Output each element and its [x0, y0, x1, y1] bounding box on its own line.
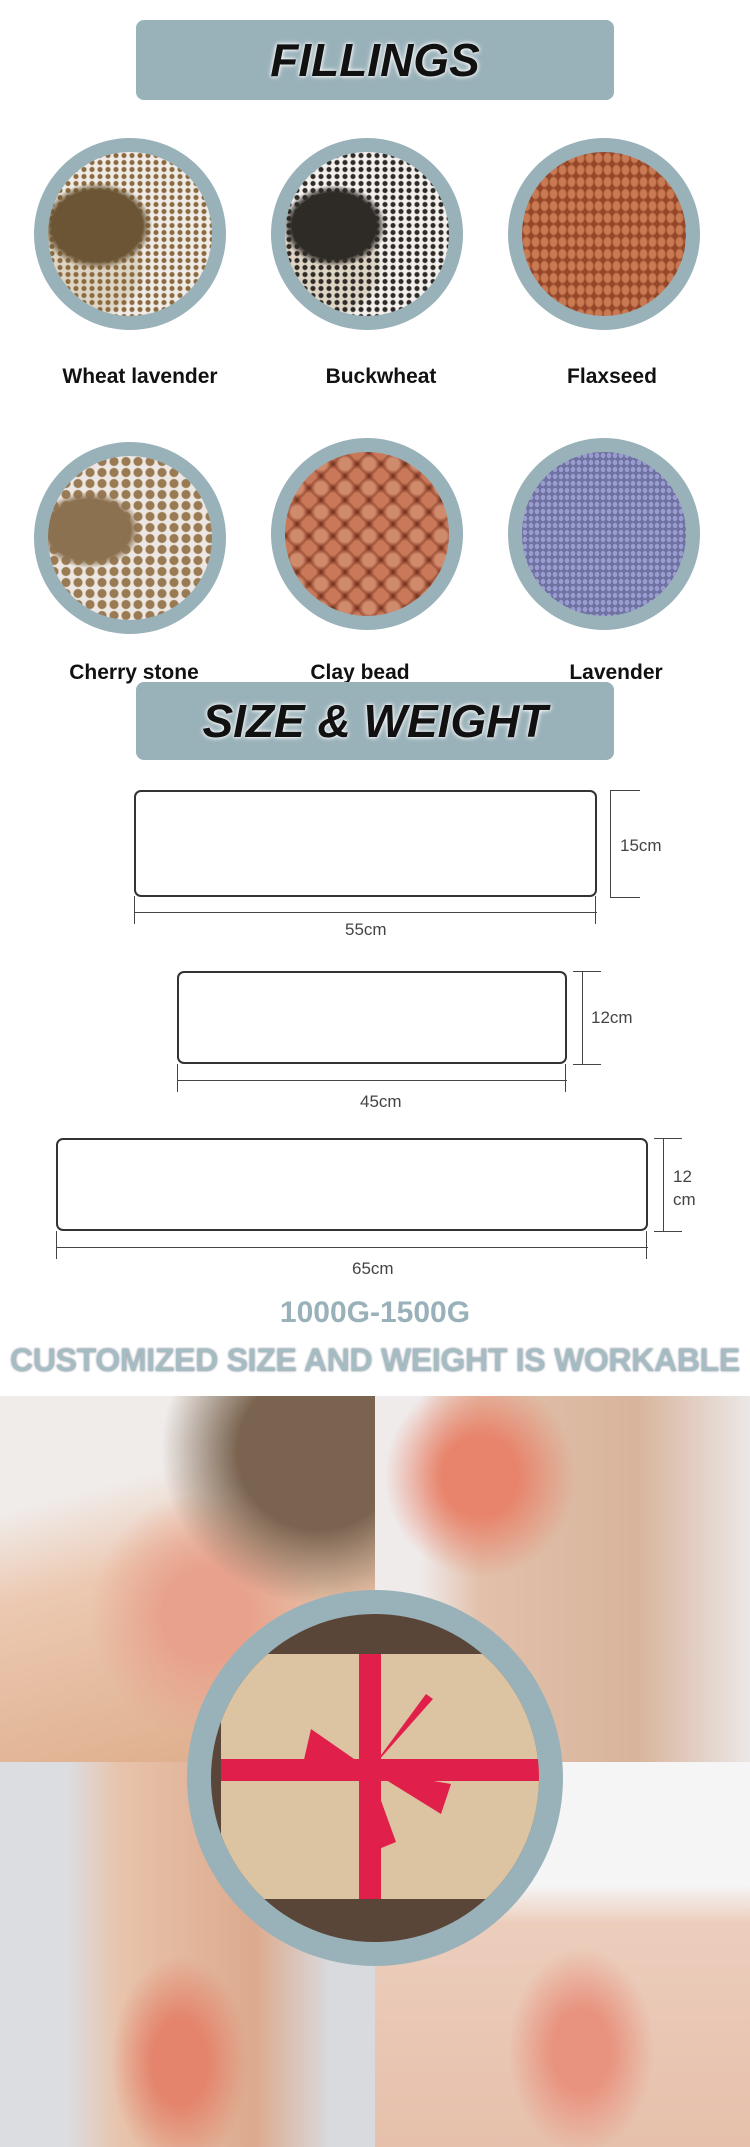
- photo: shoulder pain: [375, 1396, 750, 1762]
- title: fillings: FILLINGS: [270, 34, 480, 86]
- diagram: 65x12: 12: [673, 1167, 692, 1186]
- icon: buckwheat: [271, 138, 463, 330]
- icon: wheat lavender: [34, 138, 226, 330]
- diagram: 55x15: 15cm: [620, 836, 662, 855]
- diagram: 55x15: 55cm: [345, 920, 387, 939]
- title: size & weight: SIZE & WEIGHT: [202, 695, 548, 747]
- diagram: 55x15: [134, 790, 662, 939]
- diagram: 65x12: cm: [673, 1190, 696, 1209]
- diagram: 45x12: [177, 971, 633, 1111]
- photo: knee pain: [0, 1762, 375, 2147]
- photo grid: [0, 1396, 750, 2147]
- label: clay bead: Clay bead: [310, 661, 410, 684]
- photo: neck pain: [0, 1396, 375, 1762]
- photo: abdominal pain: [375, 1762, 750, 2147]
- label: wheat lavender: Wheat lavender: [62, 365, 218, 388]
- label: cherry stone: Cherry stone: [69, 661, 199, 684]
- icon: lavender: [508, 438, 700, 630]
- icon: flaxseed: [508, 138, 700, 330]
- diagram: 45x12: 12cm: [591, 1008, 633, 1027]
- label: lavender: Lavender: [569, 661, 663, 684]
- label: flaxseed: Flaxseed: [567, 365, 657, 388]
- title: size & weight: [136, 682, 614, 760]
- text: weight range: 1000G-1500G: [280, 1296, 470, 1329]
- diagram: 65x12: [56, 1138, 696, 1278]
- icon: cherry stone: [34, 442, 226, 634]
- label: buckwheat: Buckwheat: [326, 365, 436, 388]
- diagram: 65x12: 65cm: [352, 1259, 394, 1278]
- text: customized note: CUSTOMIZED SIZE AND WEIGHT IS WORKABLE: [10, 1342, 740, 1378]
- icon: clay bead: [271, 438, 463, 630]
- diagram: 45x12: 45cm: [360, 1092, 402, 1111]
- icon: gift box in circle: [187, 1590, 563, 1966]
- title: fillings: [136, 20, 614, 100]
